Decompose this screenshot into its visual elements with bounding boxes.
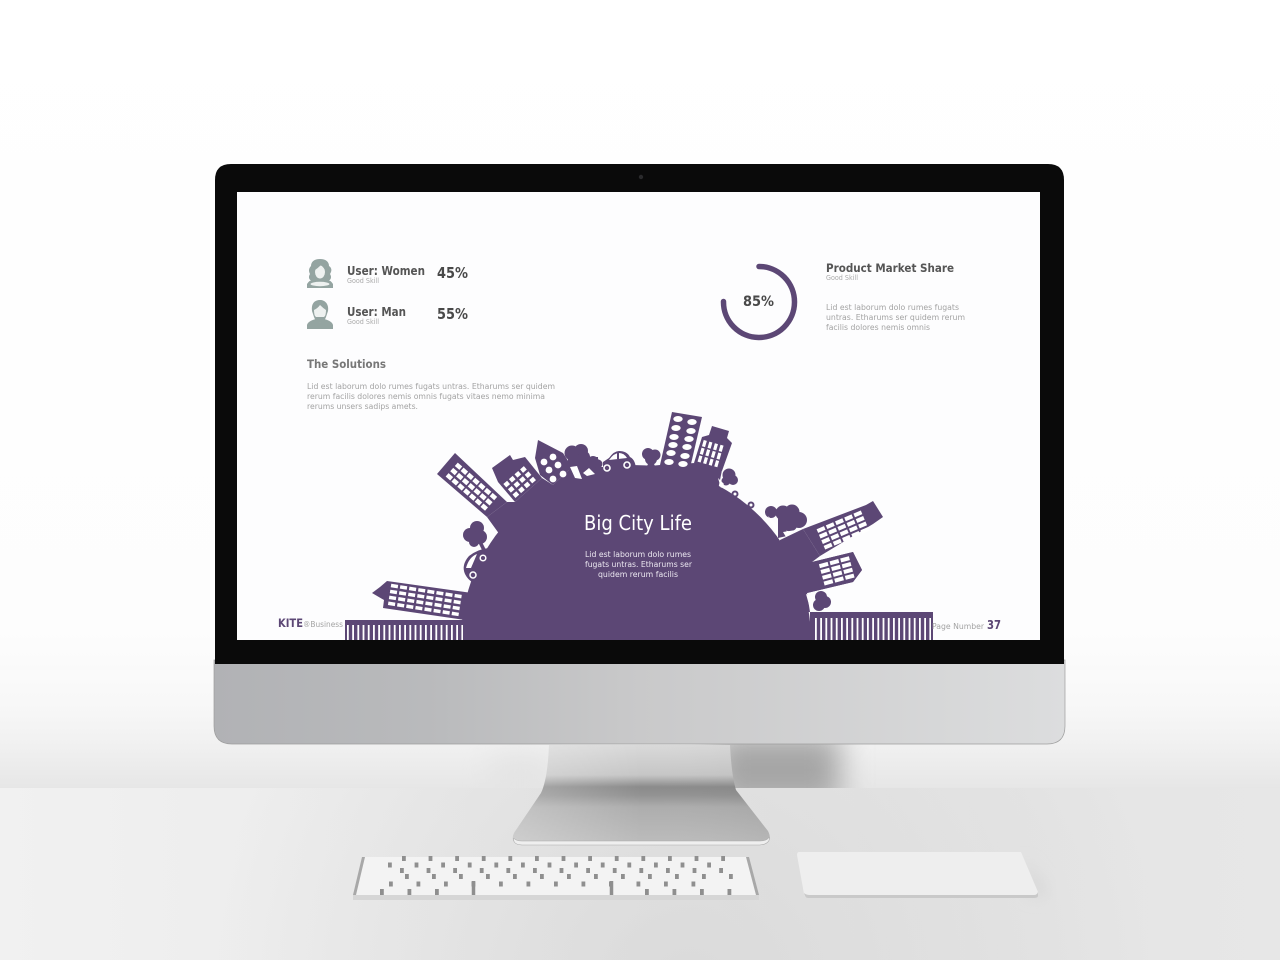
icon: woman xyxy=(307,259,333,288)
tree cluster xyxy=(564,444,602,479)
keyboard body xyxy=(353,857,759,900)
globe paragraph: quidem rerum facilis xyxy=(598,569,678,579)
heading: The Solutions xyxy=(307,357,386,371)
value: 45%: 45% xyxy=(437,264,468,282)
text block: product market share xyxy=(826,261,965,332)
webcam xyxy=(639,175,643,179)
small tree right xyxy=(718,468,738,488)
building 6 xyxy=(803,501,883,556)
bottom left block xyxy=(345,620,466,640)
sublabel: Good Skill xyxy=(826,274,858,282)
keyboard edge xyxy=(353,895,759,900)
paragraph xyxy=(307,381,555,411)
car xyxy=(603,451,636,471)
footer brand: ®Business xyxy=(303,619,343,629)
paragraph: untras. Etharums ser quidem rerum xyxy=(826,312,965,322)
big tree right xyxy=(765,504,807,538)
left car xyxy=(464,548,490,584)
value: 55%: 55% xyxy=(437,305,468,323)
monitor bezel xyxy=(215,164,1064,664)
monitor xyxy=(214,164,1065,744)
stand shadow on wall xyxy=(715,735,840,805)
soft shadow left of stand xyxy=(490,755,550,800)
icon: man xyxy=(307,300,333,329)
donut chart: 85% xyxy=(723,266,794,337)
building 8 xyxy=(372,581,472,620)
left tree xyxy=(463,521,487,550)
slide content xyxy=(278,259,1001,640)
building 2 xyxy=(492,455,542,502)
paragraph: rerums unsers sadips amets. xyxy=(307,401,418,411)
building 3: house xyxy=(535,440,572,485)
value: 85% xyxy=(743,294,774,310)
footer brand xyxy=(278,616,343,630)
globe title: Big City Life xyxy=(584,511,692,535)
ring xyxy=(723,266,794,337)
building 5 xyxy=(694,426,732,471)
globe paragraph: fugats untras. Etharums ser xyxy=(585,559,693,569)
small tree lower right xyxy=(806,591,831,612)
user women row xyxy=(307,259,468,288)
globe paragraph: Lid est laborum dolo rumes xyxy=(585,549,691,559)
globe paragraph xyxy=(585,549,693,579)
footer page number: Page Number xyxy=(932,621,985,631)
background: table xyxy=(0,788,1280,960)
sublabel: Good Skill xyxy=(347,277,379,285)
text block: the solutions xyxy=(307,357,555,411)
sublabel: Good Skill xyxy=(347,318,379,326)
label: user women: User: Women xyxy=(347,264,425,278)
paragraph: facilis dolores nemis omnis xyxy=(826,322,930,332)
bottom right block xyxy=(810,612,933,640)
monitor stand xyxy=(513,745,770,845)
paragraph: rerum facilis dolores nemis omnis fugats vitaes nemo minima xyxy=(307,391,545,401)
heading: Product Market Share xyxy=(826,261,954,275)
paragraph xyxy=(826,302,965,332)
footer page number xyxy=(932,618,1001,632)
screen xyxy=(237,192,1040,640)
right ground fill xyxy=(780,529,862,612)
city globe illustration xyxy=(345,412,933,640)
building 7 xyxy=(807,552,862,593)
building 4: tall tower xyxy=(660,412,702,468)
keyboard xyxy=(353,857,759,900)
tree xyxy=(642,448,660,468)
ground fill xyxy=(487,463,722,540)
trackpad shadow xyxy=(1024,860,1050,895)
keyboard key gaps xyxy=(380,858,736,895)
footer page number: 37 xyxy=(987,618,1001,632)
paragraph: Lid est laborum dolo rumes fugats xyxy=(826,302,959,312)
monitor chin xyxy=(214,660,1065,744)
footer brand: KITE xyxy=(278,616,303,630)
globe xyxy=(461,465,811,640)
trackpad xyxy=(797,852,1038,898)
user man row xyxy=(307,300,468,329)
building 1 xyxy=(437,453,507,517)
wheels on horizon xyxy=(732,492,754,508)
paragraph: Lid est laborum dolo rumes fugats untras. Etharums ser quidem xyxy=(307,381,555,391)
label: user man: User: Man xyxy=(347,305,406,319)
